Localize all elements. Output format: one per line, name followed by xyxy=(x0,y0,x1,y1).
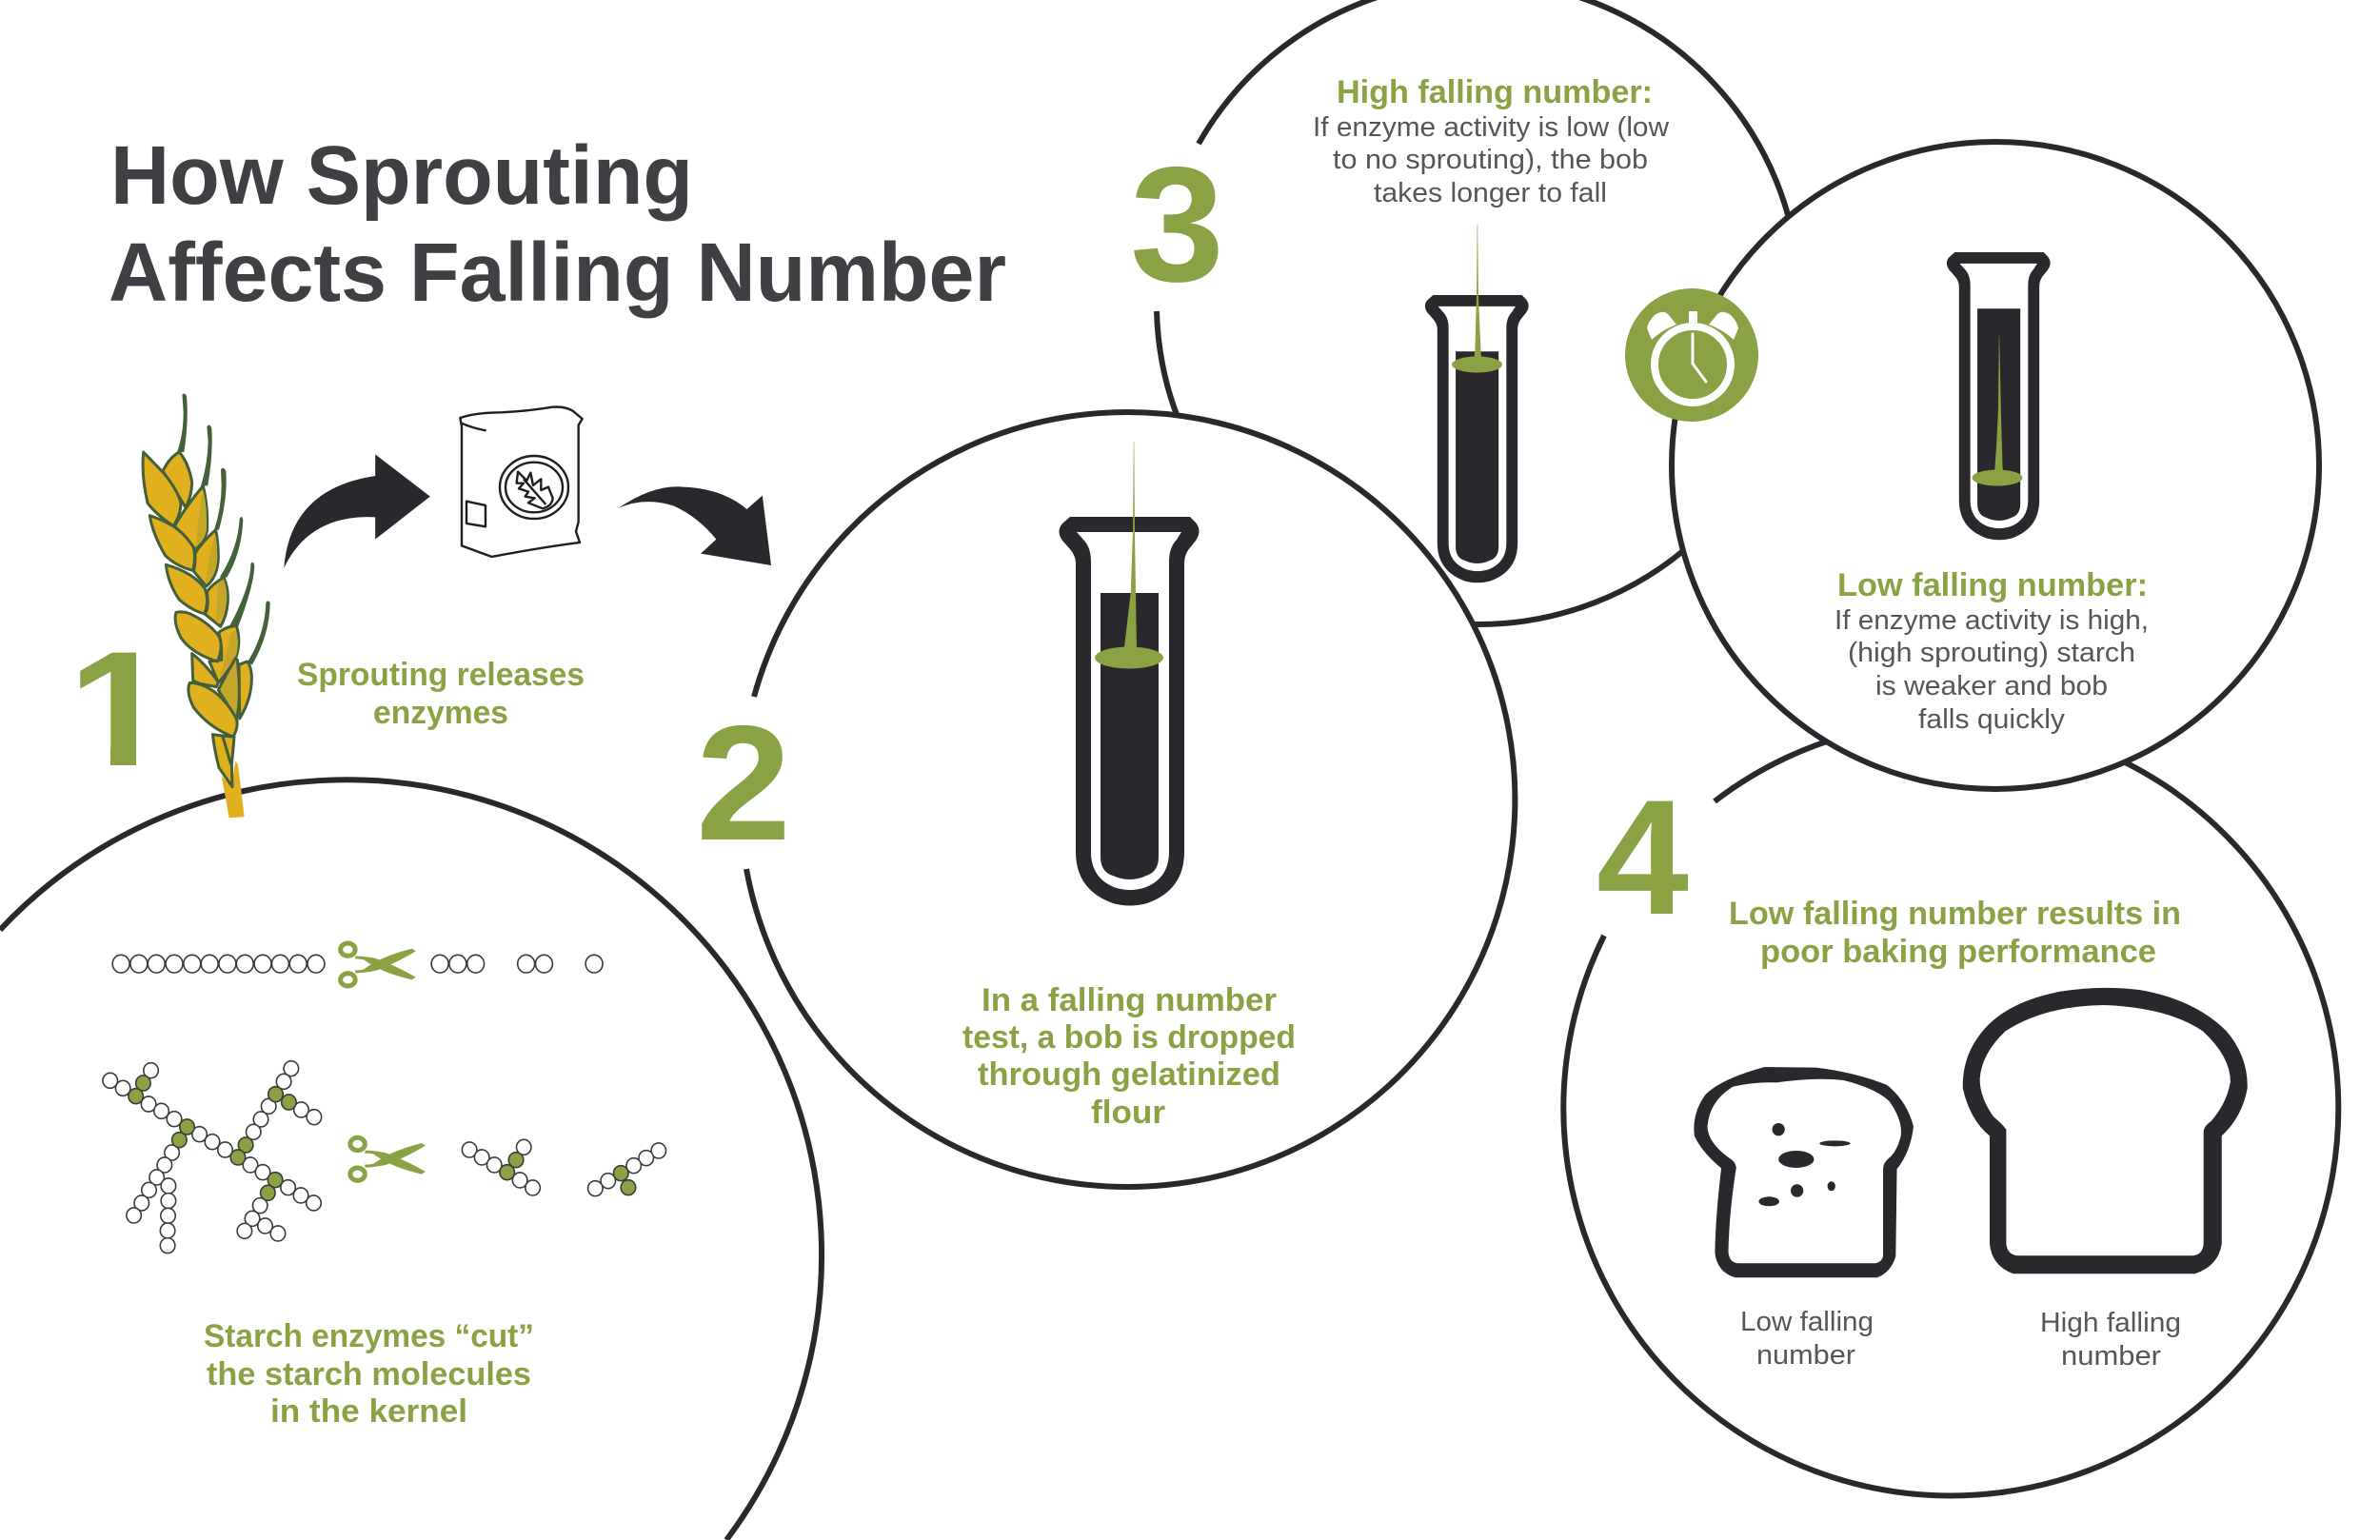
arrow: flour to test xyxy=(618,486,771,565)
circle: high falling number panel xyxy=(1157,0,1800,624)
text: high falling number: High falling number: xyxy=(1337,74,1653,110)
text: poor baking performance: poor baking performance xyxy=(1760,934,2156,970)
icon: test tube low falling number xyxy=(1947,252,2051,540)
text: poor baking performance: Low falling number results in xyxy=(1729,896,2181,932)
text: high falling number: to no sprouting), the bob xyxy=(1333,145,1648,175)
label: high falling number bread xyxy=(2040,1308,2181,1372)
text: poor baking performance xyxy=(1729,896,2181,970)
text: starch enzymes cut: the starch molecules xyxy=(207,1356,531,1392)
text: low falling number: Low falling number: xyxy=(1837,567,2148,603)
title: Affects Falling Number xyxy=(109,227,1006,319)
icon: alarm clock xyxy=(1625,288,1758,422)
text: low falling number: is weaker and bob xyxy=(1875,671,2108,701)
diagram: branched starch molecule being cut xyxy=(103,1061,666,1254)
step number 2: 2 xyxy=(696,692,791,875)
icon: high falling number bread xyxy=(1963,988,2248,1273)
icon: scissors xyxy=(341,943,416,986)
label: high falling number bread: number xyxy=(2061,1341,2162,1372)
title: How Sprouting xyxy=(110,129,693,222)
circle: step 4 baking performance panel xyxy=(1563,721,2338,1495)
circle: step 2 falling number test panel xyxy=(746,412,1515,1187)
text: falling number test xyxy=(962,982,1296,1131)
icon: wheat ear xyxy=(143,394,270,818)
label: low falling number bread xyxy=(1740,1307,1874,1371)
icon: large test tube with bob xyxy=(1059,442,1200,906)
label: high falling number bread: High falling xyxy=(2040,1308,2181,1338)
cut fragments xyxy=(431,955,603,973)
text: sprouting releases enzymes: Sprouting releases xyxy=(297,657,585,693)
diagram: linear starch molecule being cut xyxy=(112,943,603,986)
text: low falling number: (high sprouting) starch xyxy=(1848,638,2135,668)
text: starch enzymes cut: in the kernel xyxy=(270,1393,467,1430)
text: sprouting releases enzymes xyxy=(297,657,585,731)
step number 4: 4 xyxy=(1597,766,1689,949)
text: high falling number: If enzyme activity is low (low xyxy=(1313,112,1669,143)
text: falling number test: test, a bob is dropped xyxy=(962,1019,1296,1056)
text: high falling number: takes longer to fall xyxy=(1374,178,1607,208)
label: low falling number bread: number xyxy=(1756,1340,1856,1371)
branched fragment two xyxy=(588,1143,666,1196)
text: starch enzymes cut xyxy=(204,1318,534,1430)
branched molecule xyxy=(103,1061,322,1254)
text: low falling number: If enzyme activity is high, xyxy=(1835,605,2149,636)
step number 1: 1 xyxy=(68,618,170,800)
arrow: wheat to flour xyxy=(284,454,430,568)
icon: flour bag xyxy=(460,406,583,557)
title xyxy=(109,129,1006,319)
step number 3: 3 xyxy=(1130,133,1224,316)
icon: test tube high falling number xyxy=(1425,224,1529,582)
circle: step 1 starch panel xyxy=(0,780,822,1540)
text: starch enzymes cut: Starch enzymes “cut” xyxy=(204,1318,534,1354)
icon: low falling number bread xyxy=(1694,1067,1914,1277)
label: low falling number bread: Low falling xyxy=(1740,1307,1874,1337)
text: falling number test: In a falling number xyxy=(982,982,1277,1018)
text: low falling number xyxy=(1835,567,2149,735)
circle: low falling number panel xyxy=(1672,142,2319,789)
text: falling number test: through gelatinized xyxy=(978,1056,1280,1093)
text: falling number test: flour xyxy=(1091,1095,1165,1131)
text: low falling number: falls quickly xyxy=(1918,704,2066,735)
branched fragment one xyxy=(462,1139,540,1195)
long chain xyxy=(112,955,325,973)
text: high falling number xyxy=(1313,74,1669,208)
icon: scissors xyxy=(350,1137,426,1180)
text: sprouting releases enzymes: enzymes xyxy=(373,695,508,731)
